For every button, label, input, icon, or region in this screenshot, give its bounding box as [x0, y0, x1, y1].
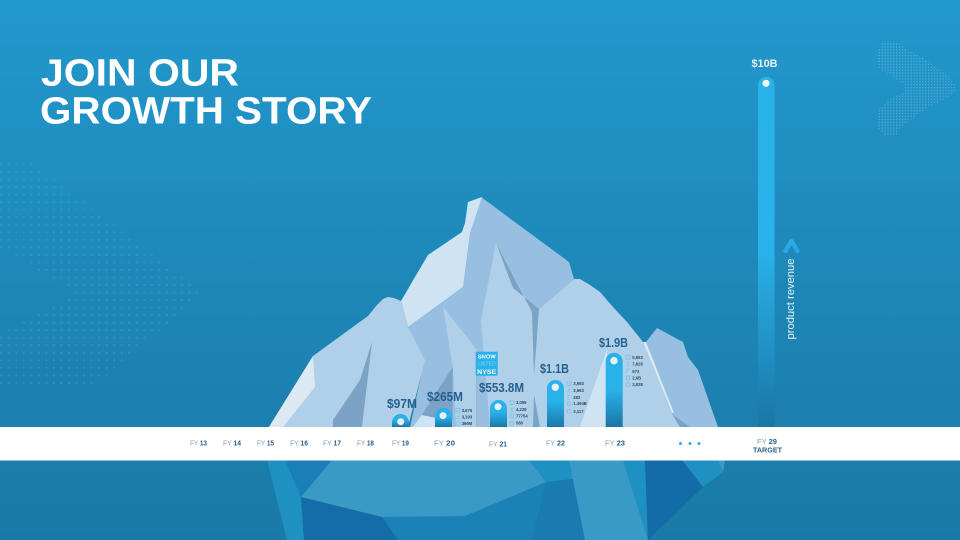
stats: FY 23: 573 — [632, 369, 640, 374]
stats: FY 23 — [626, 355, 643, 387]
stats: FY 22: 3,993 — [573, 381, 584, 386]
stats: FY 21: 580 — [516, 420, 524, 426]
bar: FY 23: $1.9B — [599, 336, 628, 350]
timeline labels: FY 21 — [489, 440, 507, 448]
timeline labels: FY 20 — [434, 438, 455, 448]
stats: FY 20 — [456, 408, 473, 426]
bar: FY 21 — [479, 381, 528, 427]
stats: FY 22: 3,117 — [573, 409, 584, 414]
stats: FY 23: 7,828 — [632, 362, 643, 366]
white timeline band — [0, 427, 960, 460]
iceberg below water — [267, 460, 725, 540]
bar: FY 20 — [427, 390, 473, 427]
bar: FY 29 target: $10B — [752, 58, 778, 70]
stats: FY 21: 3,095 — [516, 400, 527, 405]
bar: FY 20: $265M — [427, 390, 463, 404]
stats: FY 22 — [567, 381, 587, 414]
title: GROWTH STORY — [40, 90, 372, 132]
timeline labels — [190, 437, 782, 454]
bar: FY 22: $1.1B — [540, 362, 569, 376]
timeline labels: FY 17 — [323, 440, 341, 448]
stats: FY 21: 77754 — [516, 414, 528, 418]
bar: FY 23 — [599, 336, 643, 427]
stats: FY 22: 1.494B — [573, 401, 587, 406]
bar: FY 21: $553.8M — [479, 381, 524, 395]
badge: Snow listed NYSE: LISTED — [478, 362, 496, 368]
axis label: product revenue: product revenue — [785, 258, 797, 340]
badge: Snow listed NYSE — [476, 352, 498, 427]
badge: Snow listed NYSE: NYSE — [477, 369, 497, 376]
stats: FY 20: 3,193 — [462, 414, 473, 420]
bar: FY 29 target — [752, 58, 778, 427]
iceberg above water — [269, 197, 718, 427]
dot pattern: left chevron — [0, 162, 199, 386]
stats: FY 23: 2,6B — [632, 376, 641, 380]
stats: FY 23: 5,893 — [632, 355, 643, 360]
bar: FY 22 — [540, 362, 587, 427]
stats: FY 21 — [510, 400, 528, 426]
stats: FY 20: 3,676 — [462, 408, 473, 413]
bar: FY 19 — [387, 397, 417, 427]
timeline labels: FY 29 — [757, 437, 777, 446]
timeline labels: TARGET — [753, 446, 782, 454]
stats: FY 20: 366M — [462, 421, 473, 426]
timeline labels: FY 13 — [190, 440, 207, 448]
dot pattern: top right chevron — [877, 42, 955, 135]
stats: FY 21: 4,229 — [516, 407, 527, 412]
stats: FY 22: 3,963 — [573, 388, 584, 393]
timeline labels: FY 14 — [223, 440, 241, 448]
title: JOIN OUR — [41, 53, 239, 95]
arrow: product revenue — [786, 241, 798, 251]
timeline labels: FY 22 — [546, 438, 565, 448]
timeline labels: FY 23 — [605, 438, 625, 448]
stats: FY 23: 3,838 — [632, 382, 643, 387]
timeline labels: FY 16 — [290, 440, 308, 448]
stats: FY 22: 492 — [573, 395, 581, 400]
timeline labels: FY 15 — [257, 440, 274, 448]
bar: FY 19: $97M — [387, 397, 417, 411]
timeline ellipsis — [679, 442, 700, 445]
badge: Snow listed NYSE: SNOW — [478, 354, 497, 360]
timeline labels: FY 18 — [357, 440, 374, 448]
timeline labels: FY 19 — [392, 440, 409, 448]
title — [40, 53, 372, 132]
